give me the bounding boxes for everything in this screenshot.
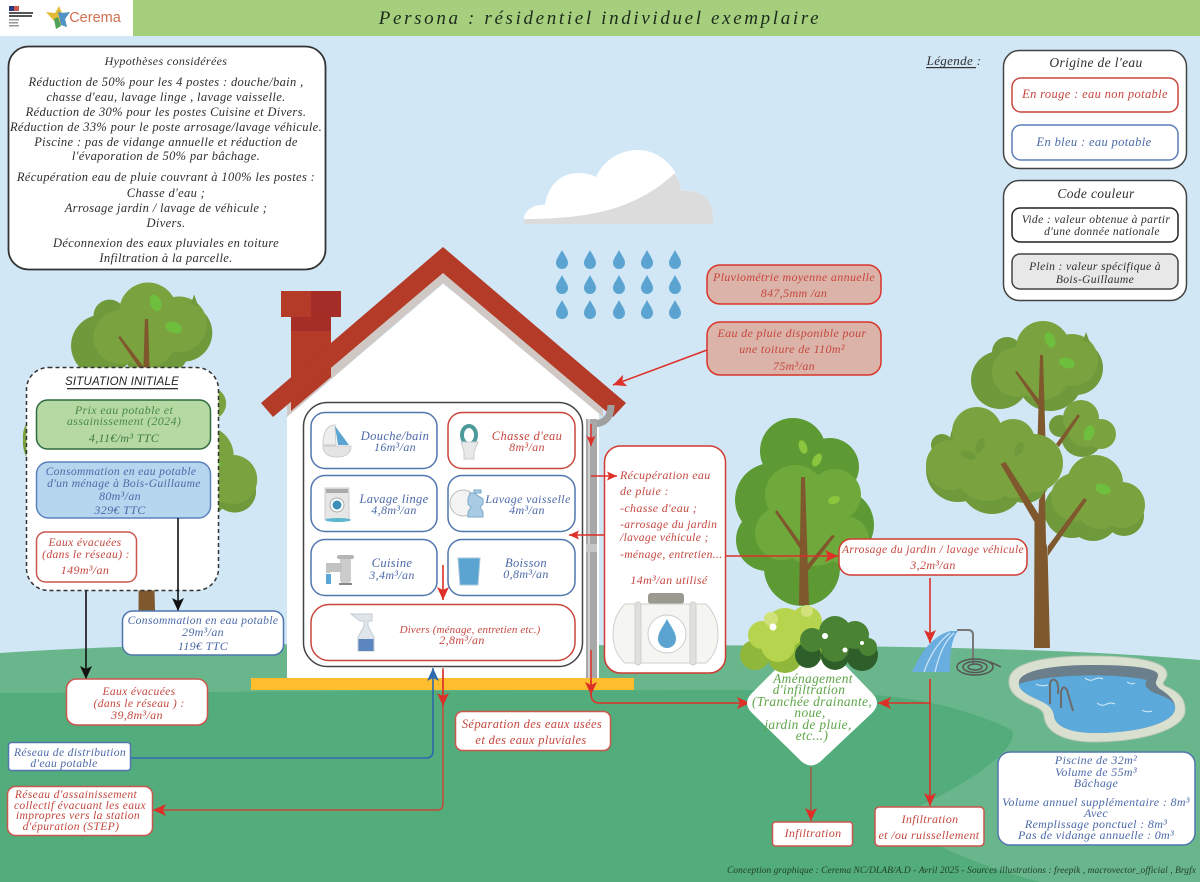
logo: Cerema: Cerema [69, 10, 122, 26]
panel: piscine: Remplissage ponctuel : 8m³ [1024, 817, 1167, 831]
room: divers: 2,8m³/an [439, 633, 485, 647]
arrow: séparation tête [442, 670, 444, 706]
panel: piscine: Pas de vidange annuelle : 0m³ [1017, 828, 1174, 842]
box: eaux évacuées initiale [36, 532, 136, 582]
gutter and downpipe [586, 405, 611, 678]
house [251, 247, 634, 690]
panel: récupération eau de pluie: Récupération eau [619, 468, 711, 482]
room: boisson: 0,8m³/an [503, 567, 549, 581]
box: réseau de distribution [8, 742, 130, 770]
box: séparation: Séparation des eaux usées [462, 717, 602, 731]
box: séparation: et des eaux pluviales [475, 733, 587, 747]
room: chasse d'eau: 8m³/an [509, 440, 545, 454]
icon: lave-linge [325, 488, 351, 522]
panel: hypotheses: Chasse d'eau ; [127, 186, 205, 200]
diamond: aménagement d'infiltration: jardin de pluie, [762, 717, 852, 732]
box: réseau d'assainissement: impropres vers la station [16, 809, 140, 822]
box: eaux évacuées après: Eaux évacuées [101, 685, 176, 698]
icon: baignoire douche [323, 425, 351, 457]
panel: hypotheses: Arrosage jardin / lavage de véhicule ; [64, 201, 267, 215]
box: arrosage [839, 539, 1027, 575]
room: chasse d'eau: Chasse d'eau [492, 429, 562, 443]
panel: hypotheses: Réduction de 33% pour le poste arrosage/lavage véhicule. [9, 120, 322, 134]
box: eaux évacuées initiale: Eaux évacuées [47, 536, 122, 549]
box: réseau d'assainissement: collectif évacuant les eaux [14, 799, 147, 812]
box: infiltration: Infiltration [784, 826, 841, 840]
arrow: arrosage vers tuyau [929, 578, 931, 643]
panel: hypotheses: Hypothèses considérées [104, 54, 227, 68]
panel: hypotheses: Réduction de 30% pour les postes Cuisine et Divers. [25, 105, 306, 119]
panel: piscine: Volume de 55m³ [1055, 765, 1137, 779]
arrow: downpipe vers aménagement [591, 650, 750, 703]
arrow: tête downpipe [590, 680, 592, 695]
panel: hypotheses: l'évaporation de 50% par bâchage. [72, 149, 260, 163]
box: consommation après: Consommation en eau potable [128, 614, 278, 627]
panel: hypotheses: Divers. [146, 216, 185, 230]
legend item: plein: Bois-Guillaume [1056, 273, 1134, 286]
legend: code couleur [1004, 180, 1186, 300]
icon: assiette et liquide vaisselle [450, 490, 483, 517]
room: lavage vaisselle [448, 476, 575, 532]
box: consommation initiale: Consommation en eau potable [46, 465, 196, 478]
box: consommation après: 119€ TTC [178, 639, 229, 653]
legend item: rouge: En rouge : eau non potable [1021, 87, 1168, 101]
box: eau de pluie disponible [707, 322, 881, 375]
logo: République française [9, 6, 33, 26]
panel: piscine: Avec [1083, 806, 1108, 820]
legend: origine de l'eau: Origine de l'eau [1049, 55, 1143, 70]
legend item: vide: Vide : valeur obtenue à partir [1022, 213, 1170, 226]
box: pluviométrie: Pluviométrie moyenne annuelle [712, 270, 875, 284]
cloud [524, 150, 713, 224]
icon: buisson clair [740, 605, 824, 673]
panel: hypotheses: chasse d'eau, lavage linge , lavage vaisselle. [46, 90, 286, 104]
box: eaux évacuées initiale: 149m³/an [61, 563, 109, 577]
diamond: aménagement d'infiltration: etc...) [796, 728, 828, 743]
arrow: situation vers eaux évacuées [85, 591, 87, 679]
legend: origine de l'eau [1004, 50, 1186, 168]
title: Persona : résidentiel individuel exemplaire [378, 8, 821, 29]
box: réseau d'assainissement [8, 786, 152, 836]
panel: hypotheses: Infiltration à la parcelle. [98, 251, 233, 265]
room: lavage linge: Lavage linge [358, 492, 429, 506]
box: eaux évacuées après: 39,8m³/an [110, 708, 163, 722]
panel: récupération eau de pluie: -chasse d'eau ; [620, 501, 697, 515]
legend item: rouge [1012, 78, 1178, 112]
box: prix eau: Prix eau potable et [74, 403, 173, 417]
house walls [287, 284, 599, 678]
box: consommation initiale: 329€ TTC [93, 503, 146, 517]
box: séparation [456, 712, 610, 750]
box: infiltration et/ou ruissellement: Infiltration [901, 812, 958, 826]
icon: verre d'eau [458, 558, 480, 585]
panel: usages intérieurs [304, 402, 582, 666]
box: consommation après [122, 611, 284, 655]
legend item: vide [1012, 208, 1178, 242]
arrow: aménagement vers infiltration [810, 767, 812, 821]
panel: récupération eau de pluie: -arrosage du jardin [620, 518, 717, 531]
room: lavage vaisselle: 4m³/an [509, 503, 545, 517]
room: divers: Divers (ménage, entretien etc.) [399, 624, 541, 636]
panel: hypotheses: Déconnexion des eaux pluviales en toiture [52, 236, 279, 250]
tree: centre [735, 418, 874, 606]
arrow: downpipe vers récupération [591, 475, 617, 477]
box: réseau de distribution: Réseau de distribution [13, 746, 126, 759]
arrow: downpipe [590, 424, 592, 446]
arrow: situation vers consommation [177, 518, 179, 611]
box: prix eau [36, 400, 210, 449]
arrow: récupération vers arrosage [726, 555, 838, 557]
box: infiltration [772, 822, 852, 846]
panel: piscine: Bâchage [1074, 776, 1119, 790]
room: chasse d'eau [448, 412, 575, 468]
panel: récupération eau de pluie: /lavage véhicule ; [619, 531, 709, 544]
box: prix eau: assainissement (2024) [67, 414, 181, 428]
panel: hypotheses [8, 46, 326, 270]
room: boisson [448, 540, 575, 596]
room: douche: Douche/bain [360, 429, 429, 443]
arrow: eau de pluie vers toiture [613, 350, 707, 385]
panel: hypotheses: Récupération eau de pluie couvrant à 100% les postes : [16, 170, 315, 184]
footer credits: Conception graphique : Cerema NC/DLAB/A.D - Avril 2025 - Sources illustrations : freepik , macrovector_official , Brgfx [727, 865, 1197, 876]
box: consommation initiale [36, 462, 210, 518]
box: eaux évacuées après: (dans le réseau ) : [93, 697, 185, 710]
arrow: récupération vers intérieur [569, 534, 604, 536]
diamond: aménagement d'infiltration: d'infiltration [773, 682, 845, 697]
foundation [251, 678, 634, 690]
panel: piscine [998, 752, 1195, 845]
icon: cuve [613, 593, 718, 665]
room: lavage linge [311, 476, 437, 532]
arrow: vers aménagement droite [878, 702, 930, 704]
box: consommation initiale: 80m³/an [99, 489, 141, 503]
box: consommation initiale: d'un ménage à Bois-Guillaume [47, 477, 201, 490]
logo: Cerema [46, 6, 122, 29]
room: lavage linge: 4,8m³/an [371, 503, 417, 517]
panel: hypotheses: Piscine : pas de vidange annuelle et réduction de [33, 135, 298, 149]
tree: right [926, 321, 1145, 648]
box: eau de pluie disponible: 75m³/an [773, 359, 815, 373]
box: arrosage: Arrosage du jardin / lavage véhicule [841, 543, 1024, 556]
header banner [0, 0, 1200, 36]
box: eaux évacuées initiale: (dans le réseau) : [42, 548, 130, 561]
panel: piscine: Volume annuel supplémentaire : 8m³ [1002, 795, 1190, 809]
legend: code couleur: Code couleur [1057, 186, 1135, 201]
panel: récupération eau de pluie [604, 446, 726, 673]
panel: récupération eau de pluie: 14m³/an utilisé [630, 573, 708, 587]
panel: piscine: Piscine de 32m² [1054, 753, 1137, 767]
ground hills [0, 644, 1200, 882]
legend item: bleu [1012, 125, 1178, 160]
box: infiltration et/ou ruissellement [875, 807, 984, 846]
arrow: tuyau vers infiltration [929, 679, 931, 806]
box: réseau d'assainissement: Réseau d'assainissement [14, 788, 138, 801]
room: boisson: Boisson [505, 556, 547, 570]
arrow: réseau eau potable [131, 668, 433, 758]
box: eau de pluie disponible: Eau de pluie disponible pour [716, 326, 867, 340]
diamond: aménagement d'infiltration: (Tranchée drainante, [752, 694, 872, 709]
icon: toilettes [461, 426, 478, 459]
box: prix eau: 4,11€/m³ TTC [89, 431, 160, 445]
tree: left [23, 283, 257, 632]
box: eaux évacuées après [66, 679, 208, 725]
room: cuisine: 3,4m³/an [368, 568, 415, 582]
box: arrosage: 3,2m³/an [909, 558, 956, 572]
rain drops [556, 250, 681, 319]
heading: situation initiale: SITUATION INITIALE [65, 376, 179, 388]
icon: piscine [1009, 656, 1185, 742]
icon: tuyau d'arrosage [912, 630, 1001, 675]
panel: situation initiale [26, 368, 218, 590]
box: eau de pluie disponible: une toiture de 110m² [739, 342, 845, 356]
legend item: plein [1012, 254, 1178, 289]
panel: récupération eau de pluie: -ménage, entretien... [620, 548, 723, 561]
room: cuisine: Cuisine [372, 556, 412, 570]
diamond: aménagement d'infiltration [747, 660, 877, 766]
panel: hypotheses: Réduction de 50% pour les 4 postes : douche/bain , [27, 75, 304, 89]
arrow: cuisine vers divers [442, 565, 444, 600]
box: réseau d'assainissement: d'épuration (STEP) [23, 820, 119, 833]
icon: buisson foncé [795, 616, 878, 671]
room: douche [311, 412, 437, 468]
icon: robinet [326, 555, 354, 585]
room: douche: 16m³/an [374, 440, 416, 454]
chimney [281, 291, 341, 411]
box: réseau de distribution: d'eau potable [30, 757, 98, 770]
roof [261, 247, 626, 417]
arrow: évacuation vers assainissement [153, 668, 443, 810]
room: cuisine [311, 540, 437, 596]
diamond: aménagement d'infiltration: Aménagement [772, 671, 853, 686]
box: pluviométrie [707, 265, 881, 304]
room: divers [311, 604, 575, 660]
box: consommation après: 29m³/an [182, 625, 224, 639]
legend item: bleu: En bleu : eau potable [1036, 135, 1152, 149]
legend item: plein: Plein : valeur spécifique à [1028, 260, 1161, 273]
legend item: vide: d'une donnée nationale [1044, 225, 1160, 238]
room: lavage vaisselle: Lavage vaisselle [484, 492, 571, 506]
diamond: aménagement d'infiltration: noue, [794, 705, 826, 720]
box: pluviométrie: 847,5mm /an [761, 286, 827, 300]
icon: pulvérisateur [351, 614, 374, 651]
panel: récupération eau de pluie: de pluie : [620, 484, 669, 498]
legend heading: Légende : [926, 53, 981, 68]
box: infiltration et/ou ruissellement: et /ou ruissellement [879, 828, 980, 842]
